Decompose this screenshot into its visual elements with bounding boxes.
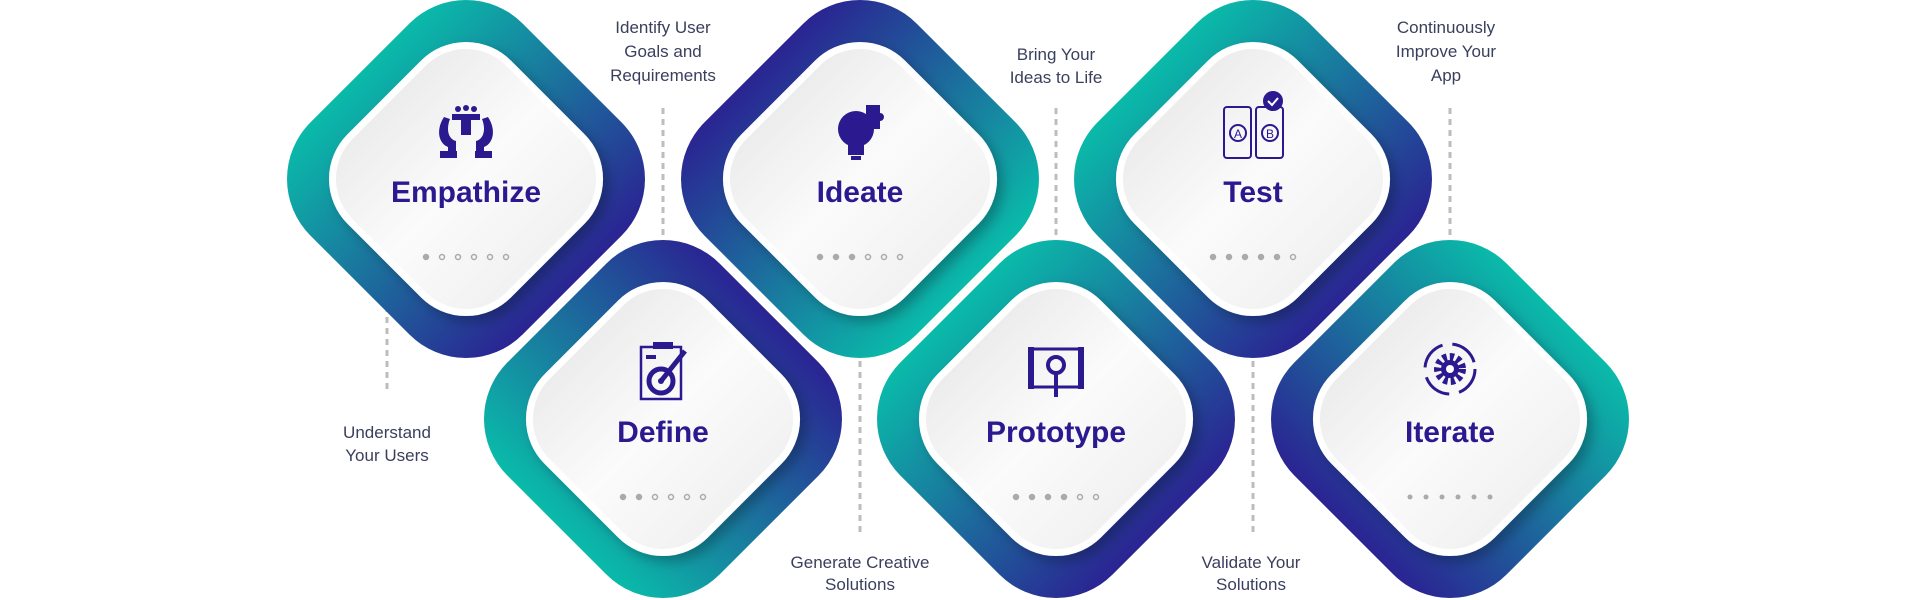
diamond: Define: [484, 240, 842, 598]
label: Bring Your Ideas: Bring Your: [1017, 45, 1096, 64]
diamond: Empathize: Empathize: [391, 176, 541, 209]
label: Identify User Goals: Goals and: [624, 42, 702, 61]
diamond: Prototype: [877, 240, 1235, 598]
progress dots: [1014, 494, 1098, 500]
label: Validate Your Solutions: Validate Your: [1202, 553, 1301, 572]
label: Identify User Goals: Identify User: [615, 18, 711, 37]
label: Generate Creative Solutions: Solutions: [825, 575, 895, 594]
diamond: Prototype: Prototype: [986, 416, 1126, 449]
diamond: Ideate: [681, 0, 1039, 358]
icon: A/B phones: A: [1234, 127, 1242, 141]
connector lines: [387, 108, 1450, 533]
label: Continuously Improve: App: [1431, 66, 1461, 85]
icon: A/B phones: B: [1266, 127, 1274, 141]
icon: clipboard target: [641, 342, 685, 399]
diamond: Iterate: Iterate: [1405, 416, 1495, 449]
label: Continuously Improve: Improve Your: [1396, 42, 1496, 61]
icon: blueprint: [1028, 347, 1084, 397]
label: Understand Your Users: Understand: [343, 423, 431, 442]
label: Identify User Goals: Requirements: [610, 66, 716, 85]
icon: people in hands: [439, 105, 493, 158]
label: Generate Creative Solutions: Generate Creative: [791, 553, 929, 572]
label: Validate Your Solutions: Solutions: [1216, 575, 1286, 594]
diamond: Empathize: [287, 0, 645, 358]
icon: gear cycle: [1425, 344, 1475, 394]
diamond: Test: Test: [1223, 176, 1283, 209]
progress dots: [1408, 494, 1492, 500]
progress dots: [1210, 254, 1296, 260]
label: Understand Your Users: Your Users: [345, 446, 429, 465]
diamond: Test: [1074, 0, 1432, 358]
diamond: Iterate: [1271, 240, 1629, 598]
label: Continuously Improve: Continuously: [1397, 18, 1496, 37]
progress dots: [424, 254, 508, 260]
icon: A/B phones: [1224, 92, 1283, 158]
diamond: Define: Define: [617, 416, 709, 449]
label: Bring Your Ideas: Ideas to Life: [1010, 68, 1102, 87]
progress dots: [818, 254, 902, 260]
icon: bulb puzzle: [838, 105, 884, 160]
diamond: Ideate: Ideate: [817, 176, 903, 209]
progress dots: [620, 494, 706, 500]
